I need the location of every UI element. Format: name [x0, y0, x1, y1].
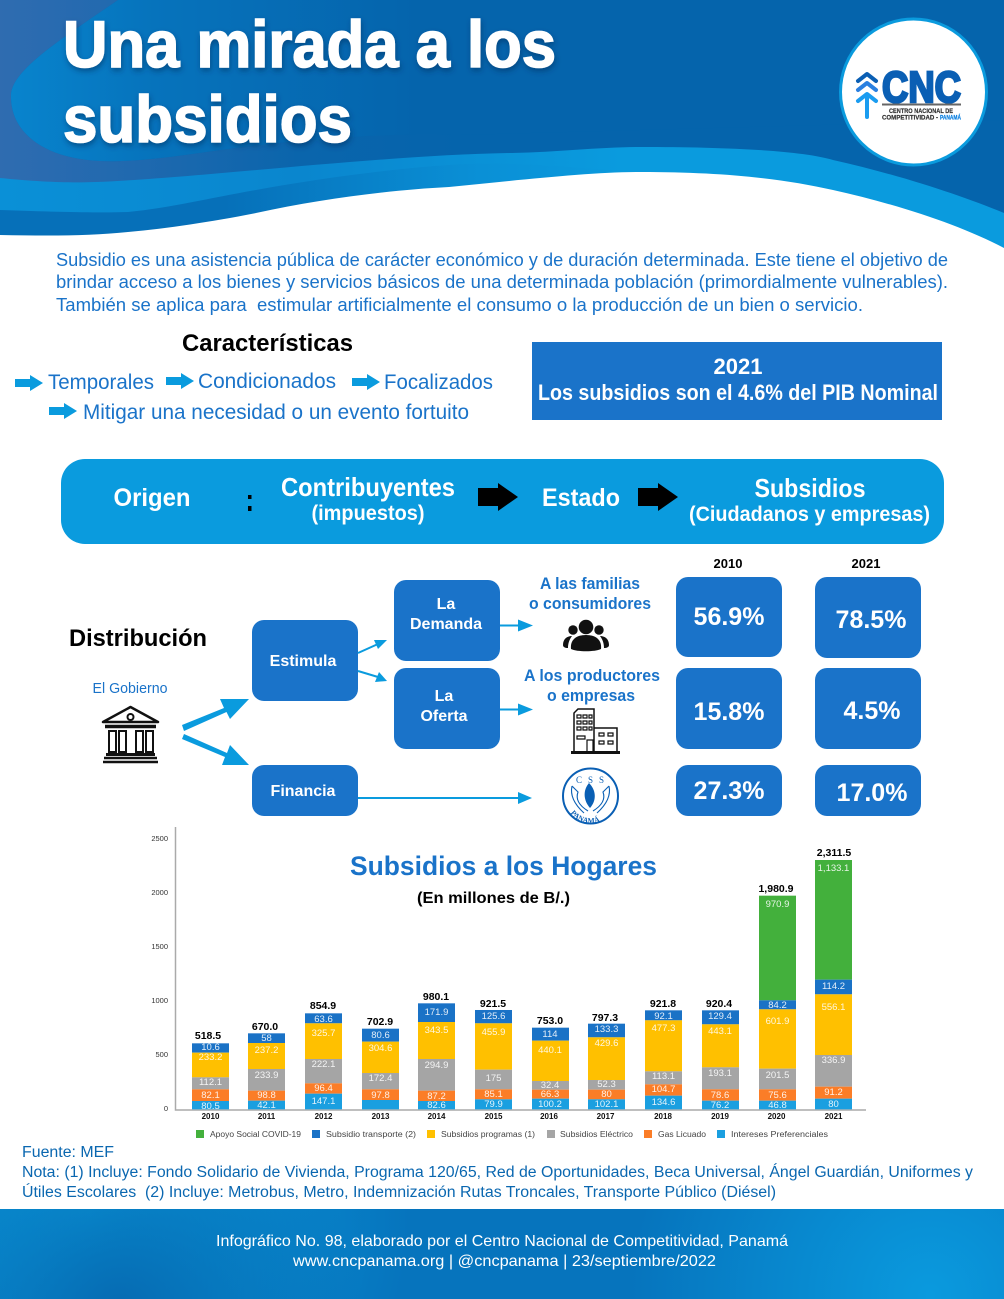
bars: 2016: 66.3: [541, 1089, 559, 1100]
bars: 2021: 80: [828, 1099, 839, 1110]
bars: 2020: [758, 883, 796, 1121]
bars: 2018: 2018: [654, 1112, 672, 1121]
bars: 2016: 440.1: [538, 1045, 562, 1056]
icon: government building: [103, 707, 158, 762]
bars: 2020: 84.2: [768, 1000, 787, 1011]
box: La Oferta: Oferta: [420, 708, 468, 725]
intro paragraph: Subsidio es una asistencia pública de carácter económico y de duración determinada. Este tiene el objetivo de: [56, 250, 948, 270]
legend: Subsidios programas (1): [441, 1130, 535, 1139]
bars: 2016: 32.4: [541, 1080, 559, 1091]
footer: Infográfico No. 98, elaborado por el Centro Nacional de Competitividad, Panamá: [216, 1233, 788, 1250]
box: La Demanda: Demanda: [410, 616, 482, 633]
bars: 2017: 429.6: [595, 1038, 618, 1049]
arrow: to Estado: [478, 483, 518, 511]
footer: [0, 1209, 1004, 1299]
bar chart: [151, 827, 866, 1139]
bars: 2010: 80.5: [201, 1101, 220, 1112]
bars: 2017: 797.3: [592, 1012, 618, 1024]
icon: buildings: [571, 709, 620, 752]
source notes: Útiles Escolares (2) Incluye: Metrobus, Metro, Indemnización Rutas Troncales, Transporte Público (Diésel): [22, 1184, 776, 1201]
title: Una mirada a los: [63, 7, 556, 81]
logo: CNC: PANAMÁ: [940, 114, 962, 122]
bars: 2015: 455.9: [482, 1027, 505, 1038]
bars: 2021: 1,133.1: [818, 863, 849, 874]
icon: tree arrows: [858, 74, 876, 117]
bars: 2015: 2015: [485, 1112, 503, 1121]
bars: 2010: 233.2: [199, 1052, 222, 1063]
bars: 2010: 10.6: [201, 1042, 220, 1053]
bars: 2015: 921.5: [480, 998, 506, 1010]
title: [63, 7, 556, 156]
callout: 2021 PIB: 2021: [714, 354, 762, 379]
box: La Oferta: La: [435, 688, 453, 705]
footer: www.cncpanama.org | @cncpanama | 23/septiembre/2022: [292, 1253, 716, 1270]
icon: CSS Panamá logo: [562, 768, 619, 824]
bars: 2016: 114: [542, 1029, 558, 1040]
bars: 2021: [815, 847, 852, 1121]
bars: 2017: 102.1: [595, 1099, 618, 1110]
bars: 2014: 171.9: [425, 1007, 448, 1018]
callout: 2021 PIB: [532, 342, 942, 420]
y axis labels: 1500: [151, 942, 168, 951]
bars: 2017: 80: [601, 1089, 612, 1100]
bars: 2018: 113.1: [652, 1071, 675, 1082]
bars: 2013: 2013: [372, 1112, 390, 1121]
axes: [176, 827, 866, 1110]
panel: origen: Estado: [542, 484, 620, 512]
y axis labels: 2500: [151, 834, 168, 843]
year headers: 2010: [714, 556, 742, 571]
bars: 2019: 920.4: [706, 998, 732, 1010]
year headers: 2021: [852, 556, 880, 571]
bars: 2019: 78.6: [711, 1090, 729, 1101]
bars: 2013: [362, 1016, 399, 1121]
source notes: [22, 1144, 973, 1201]
bars: 2013: 172.4: [369, 1073, 392, 1084]
bars: 2020: 46.8: [768, 1100, 787, 1111]
panel: origen: Origen: [114, 484, 190, 512]
box: Estimula: Estimula: [270, 653, 336, 670]
bars: 2012: 2012: [315, 1112, 333, 1121]
icon: CSS Panamá logo: CSS: [576, 775, 604, 785]
bars: 2011: 670.0: [252, 1021, 278, 1033]
panel: origen: Contribuyentes: [281, 472, 455, 502]
bars: 2012: 63.6: [314, 1014, 333, 1025]
list of characteristics: [15, 370, 493, 424]
bars: 2015: 79.9: [484, 1099, 503, 1110]
percent: demanda 2021: [815, 577, 921, 658]
intro paragraph: brindar acceso a los bienes y servicios básicos de una determinada población (primordialmente vulnerables).: [56, 272, 948, 292]
percent: demanda 2021: 78.5%: [836, 606, 906, 634]
bars: 2020: 1,980.9: [758, 883, 794, 895]
arrow: to Subsidios: [638, 483, 678, 511]
percent boxes: [676, 577, 921, 816]
bars: 2017: 2017: [597, 1112, 615, 1121]
logo: CNC: CNC: [882, 63, 961, 112]
bars: 2019: 193.1: [708, 1068, 732, 1079]
bars: 2012: [305, 1000, 342, 1121]
bars: 2013: 304.6: [369, 1043, 392, 1054]
bars: 2010: 2010: [202, 1112, 220, 1121]
bars: 2017: [588, 1012, 625, 1121]
panel: origen: (Ciudadanos y empresas): [689, 503, 930, 526]
bars: 2017: 133.3: [595, 1024, 618, 1035]
bars: 2011: 58: [261, 1033, 272, 1044]
icon: people: [563, 620, 609, 651]
arrow: Temporales: [15, 375, 43, 391]
callout: 2021 PIB: Los subsidios son el 4.6% del PIB Nominal: [538, 380, 938, 405]
bars: 2021: 2021: [825, 1112, 843, 1121]
bars: 2021: 114.2: [822, 981, 845, 992]
source notes: Fuente: MEF: [22, 1144, 114, 1161]
label: familias: [529, 575, 651, 613]
bars: 2016: 100.2: [538, 1099, 562, 1110]
bars: 2015: 175: [486, 1073, 501, 1084]
percent: demanda 2010: 56.9%: [694, 603, 764, 631]
percent: financia 2021: 17.0%: [837, 779, 907, 807]
label: productores: o empresas: [547, 687, 635, 705]
bars: 2011: 98.8: [257, 1090, 276, 1101]
bars: 2018: 104.7: [652, 1084, 675, 1095]
percent: demanda 2010: [676, 577, 782, 657]
bars: 2015: 85.1: [484, 1089, 503, 1100]
bars: 2013: 80.6: [371, 1030, 390, 1041]
bars: 2011: 237.2: [255, 1045, 278, 1056]
bars: 2014: 343.5: [425, 1025, 448, 1036]
bars: 2018: 477.3: [652, 1023, 675, 1034]
bars: 2011: 42.1: [257, 1100, 276, 1111]
bars: 2018: [645, 998, 682, 1121]
percent: financia 2010: 27.3%: [694, 777, 764, 805]
label: productores: A los productores: [524, 667, 660, 685]
logo: CNC: COMPETITIVIDAD -: [882, 116, 938, 122]
label: familias: o consumidores: [529, 595, 651, 613]
header banner with waves: [0, 0, 1004, 262]
logo: CNC: [840, 19, 986, 165]
bars: 2021: 556.1: [822, 1002, 845, 1013]
bars: 2012: 222.1: [312, 1059, 335, 1070]
arrows: government to boxes: [182, 699, 249, 765]
intro paragraph: También se aplica para estimular artificialmente el consumo o la producción de un bien o servicio.: [56, 295, 863, 315]
bars: 2012: 147.1: [312, 1096, 335, 1107]
bars: 2020: 2020: [768, 1112, 786, 1121]
bars: 2015: [475, 998, 512, 1121]
box: Financia: [252, 765, 358, 816]
heading: Características: Características: [182, 330, 353, 357]
box: La Demanda: La: [437, 596, 455, 613]
list of characteristics: Temporales: [48, 371, 154, 394]
arrows: Estimula and Financia outputs: [358, 620, 533, 804]
bars: 2017: 52.3: [597, 1079, 616, 1090]
title: subsidios: [63, 82, 352, 156]
bars: 2016: 753.0: [537, 1015, 563, 1027]
heading: Distribución: Distribución: [69, 625, 207, 652]
list of characteristics: Focalizados: [384, 371, 493, 394]
bars: 2019: 2019: [711, 1112, 729, 1121]
bars: 2014: 294.9: [425, 1060, 448, 1071]
legend: Gas Licuado: [658, 1130, 707, 1139]
source notes: Nota: (1) Incluye: Fondo Solidario de Vivienda, Programa 120/65, Red de Oportunidades, Beca Universal, Ángel Guardián, Uniformes y: [22, 1164, 973, 1181]
bars: 2016: [532, 1015, 569, 1121]
legend: Subsidios Eléctrico: [560, 1130, 634, 1139]
bars: 2014: 82.6: [427, 1100, 446, 1111]
bars: 2010: 518.5: [195, 1030, 221, 1042]
bars: 2020: 201.5: [766, 1070, 789, 1081]
bars: 2019: 129.4: [708, 1011, 732, 1022]
bars: 2018: 921.8: [650, 998, 676, 1010]
legend: [196, 1130, 828, 1139]
list of characteristics: Condicionados: [198, 370, 336, 393]
year headers: [714, 556, 880, 571]
bars: 2010: 112.1: [199, 1077, 222, 1088]
bars: 2013: 97.8: [371, 1090, 390, 1101]
percent: oferta 2021: [815, 668, 921, 749]
percent: oferta 2021: 4.5%: [844, 697, 900, 725]
bars: 2014: 87.2: [427, 1091, 446, 1102]
bars: 2011: [248, 1021, 285, 1121]
y axis labels: [151, 834, 168, 1113]
bars: 2014: 980.1: [423, 991, 449, 1003]
y axis labels: 0: [164, 1104, 168, 1113]
percent: financia 2010: [676, 765, 782, 816]
bars: 2010: 82.1: [201, 1090, 220, 1101]
y axis labels: 500: [155, 1050, 168, 1059]
list of characteristics: Mitigar una necesidad o un evento fortuito: [83, 401, 469, 424]
panel: origen: [61, 459, 944, 544]
bars: 2018: 134.6: [652, 1097, 675, 1108]
label: familias: A las familias: [540, 575, 640, 593]
bars: 2012: 96.4: [314, 1083, 333, 1094]
arrow: Condicionados: [166, 373, 194, 389]
bars: 2012: 854.9: [310, 1000, 336, 1012]
legend: Subsidio transporte (2): [326, 1130, 416, 1139]
bars: 2013: 702.9: [367, 1016, 393, 1028]
percent: oferta 2010: 15.8%: [694, 698, 764, 726]
intro paragraph: [56, 250, 948, 315]
bars: 2014: [418, 991, 455, 1121]
box: Financia: Financia: [271, 783, 336, 800]
percent: financia 2021: [815, 765, 921, 816]
bars: 2019: 443.1: [708, 1026, 732, 1037]
arrow: Focalizados: [352, 374, 380, 390]
bars: 2021: 336.9: [822, 1055, 845, 1066]
chart subtitle: (En millones de B/.): [417, 890, 570, 907]
bars: 2011: 2011: [258, 1112, 276, 1121]
label: productores: [524, 667, 660, 705]
bars: 2012: 325.7: [312, 1028, 335, 1039]
bars: 2021: 91.2: [824, 1087, 843, 1098]
box: La Oferta: [394, 668, 500, 749]
bars: 2019: 76.2: [711, 1100, 729, 1111]
icon: CSS Panamá logo: PANAMÁ: [570, 810, 600, 822]
bars: 2020: 75.6: [768, 1090, 787, 1101]
logo: CNC: CENTRO NACIONAL DE: [889, 109, 953, 115]
box: La Demanda: [394, 580, 500, 661]
legend: Apoyo Social COVID-19: [210, 1130, 302, 1139]
panel: origen: Subsidios: [754, 473, 866, 503]
y axis labels: 2000: [151, 888, 168, 897]
bars: 2021: 2,311.5: [817, 847, 851, 859]
bars: 2020: 970.9: [766, 899, 789, 910]
bars: 2019: [702, 998, 739, 1121]
bars: 2018: 92.1: [654, 1011, 673, 1022]
arrow: Mitigar: [49, 403, 77, 419]
bars: 2010: [192, 1030, 229, 1121]
box: Estimula: [252, 620, 358, 701]
bars: 2015: 125.6: [482, 1011, 505, 1022]
bars: 2011: 233.9: [255, 1070, 278, 1081]
chart title: Subsidios a los Hogares: [350, 851, 657, 881]
bars: 2020: 601.9: [766, 1016, 789, 1027]
percent: oferta 2010: [676, 668, 782, 749]
y axis labels: 1000: [151, 996, 168, 1005]
label: El Gobierno: El Gobierno: [92, 681, 168, 697]
bars: 2016: 2016: [540, 1112, 558, 1121]
panel: origen: (impuestos): [312, 502, 424, 525]
bars: 2014: 2014: [428, 1112, 446, 1121]
legend: Intereses Preferenciales: [731, 1130, 828, 1139]
